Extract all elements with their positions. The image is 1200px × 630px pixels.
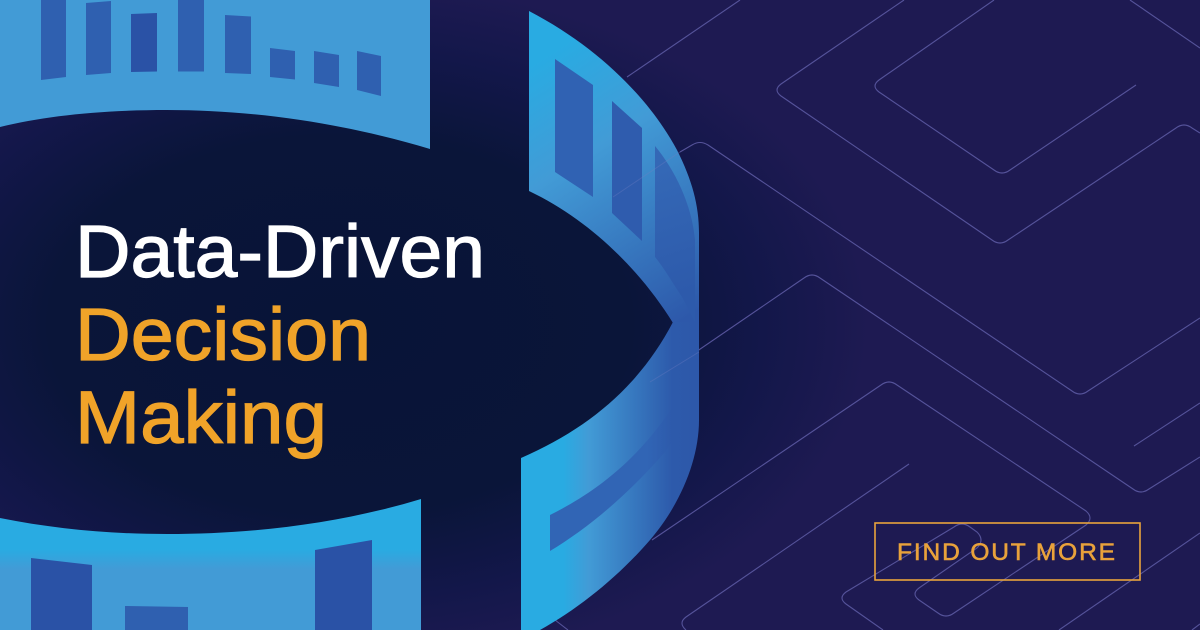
faint lines seen through the band — [613, 152, 699, 382]
band surface — [529, 11, 699, 323]
title line: Data-Driven: Data-Driven — [75, 210, 485, 293]
background circuit lines — [555, 0, 1200, 630]
chart bar on lower band — [550, 395, 680, 551]
button: find out more — [875, 523, 1140, 580]
bar chart: bottom band bars — [31, 540, 372, 630]
chart bars on upper band — [555, 59, 593, 197]
top data band — [0, 0, 430, 149]
bottom data band — [0, 499, 421, 630]
button: find out more: FIND OUT MORE — [897, 539, 1115, 566]
bar chart: top band bars — [41, 0, 381, 96]
right curved band: lower segment — [521, 322, 699, 630]
band surface — [0, 499, 421, 630]
title — [75, 210, 485, 459]
right curved band: upper segment — [529, 11, 699, 323]
band surface — [0, 0, 430, 149]
band surface — [521, 322, 699, 630]
title line: Decision: Decision — [75, 293, 371, 376]
title line: Making: Making — [75, 376, 327, 459]
